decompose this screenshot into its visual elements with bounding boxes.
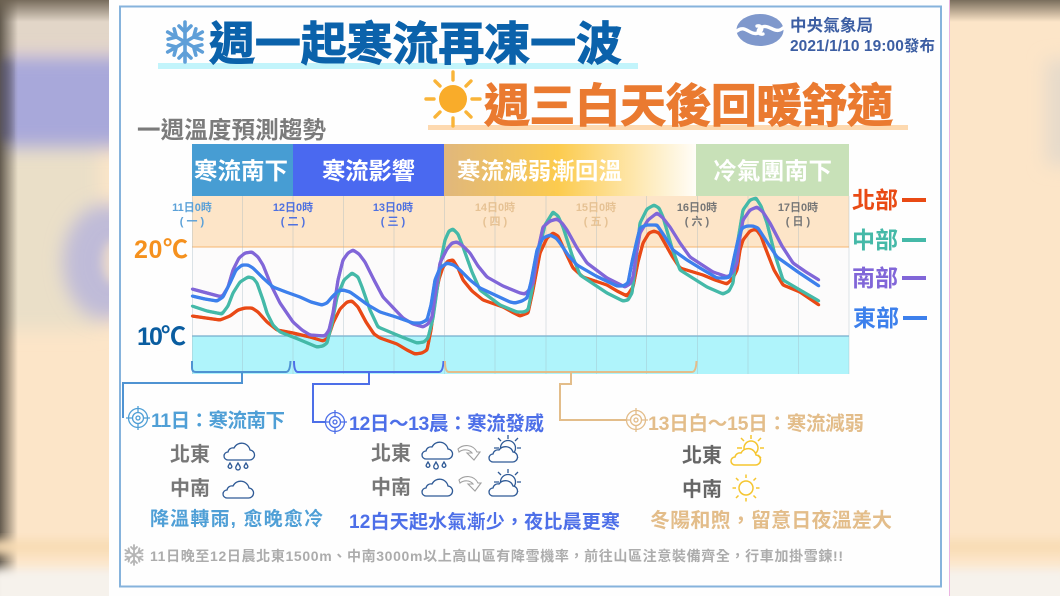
bracket: 13th to 15th bbox=[445, 361, 696, 420]
legend: north bbox=[852, 187, 926, 213]
icon: target bbox=[323, 410, 347, 434]
legend: central bbox=[852, 227, 926, 253]
icon: sun bbox=[732, 474, 760, 502]
legend: east bbox=[853, 305, 927, 331]
date labels: 14日0時 bbox=[475, 200, 515, 214]
icon: target bbox=[624, 408, 648, 432]
heading: 13日白～15日：寒流減弱 bbox=[648, 412, 864, 435]
icon: sun behind cloud bbox=[489, 469, 521, 496]
axis label: 10 degrees: 10℃ bbox=[137, 323, 186, 351]
icon: arrow bbox=[458, 446, 480, 460]
date labels: ( 二 ) bbox=[281, 216, 306, 228]
icon: target bbox=[126, 406, 150, 430]
region: north east: 北東 bbox=[170, 443, 210, 466]
bracket: 11th bbox=[123, 361, 290, 418]
caption: 降溫轉雨, 愈晚愈冷 bbox=[150, 507, 323, 530]
region: central south: 中南 bbox=[170, 477, 210, 500]
icon: arrow bbox=[459, 477, 481, 491]
panel: 13th to 15th bbox=[624, 408, 892, 532]
chart heading: 一週溫度預測趨勢 bbox=[137, 117, 326, 143]
date labels: 12日0時 bbox=[273, 200, 313, 214]
axis label: 20 degrees: 20℃ bbox=[134, 236, 188, 264]
legend bbox=[852, 187, 927, 331]
icon: CWB logo bbox=[736, 14, 784, 46]
title underline bbox=[158, 63, 638, 69]
panel: 11th bbox=[126, 406, 323, 530]
date labels: ( 日 ) bbox=[786, 215, 811, 228]
heading: 11日：寒流南下 bbox=[151, 409, 285, 432]
date labels: ( 四 ) bbox=[483, 216, 508, 228]
white sheet with blue frame bbox=[109, 0, 950, 596]
publish date: 2021/1/10 19:00發布 bbox=[790, 36, 935, 55]
band: cold air bbox=[696, 144, 849, 196]
date labels: ( 三 ) bbox=[381, 216, 406, 228]
date labels: 16日0時 bbox=[677, 200, 717, 214]
icon: sun bbox=[426, 72, 480, 126]
band: warming: 寒流減弱漸回溫 bbox=[457, 157, 622, 184]
icon: grey snowflake bbox=[124, 545, 144, 565]
band: cold surge south bbox=[192, 144, 293, 196]
region: central south: 中南 bbox=[371, 476, 411, 499]
line: south bbox=[192, 207, 819, 336]
legend: south: 南部 bbox=[852, 265, 898, 291]
phase bands bbox=[192, 144, 849, 196]
footnote bbox=[124, 545, 843, 565]
icon: cloud bbox=[223, 481, 254, 498]
region: central south: 中南 bbox=[682, 478, 722, 501]
date labels: ( 六 ) bbox=[685, 214, 710, 228]
legend: south bbox=[852, 265, 926, 291]
icon: rain cloud bbox=[422, 442, 453, 469]
title: 週一起寒流再凍一波 bbox=[209, 18, 622, 70]
publisher text: 中央氣象局 bbox=[790, 15, 873, 35]
temperature chart bbox=[123, 196, 849, 422]
line: central bbox=[192, 198, 819, 347]
panel: 12th to 13th bbox=[323, 410, 620, 533]
date labels bbox=[172, 200, 818, 228]
footnote text: 11日晚至12日晨北東1500m、中南3000m以上高山區有降雪機率，前往山區注意裝備齊全，行車加掛雪鍊!! bbox=[150, 548, 843, 564]
subtitle underline bbox=[428, 125, 908, 130]
subtitle: 週三白天後回暖舒適 bbox=[484, 80, 893, 132]
date labels: ( 一 ) bbox=[180, 216, 205, 228]
bracket: 12th to 13th bbox=[294, 361, 444, 422]
date labels: 11日0時 bbox=[172, 200, 212, 214]
date labels: 17日0時 bbox=[778, 200, 818, 214]
caption: 冬陽和煦，留意日夜溫差大 bbox=[650, 508, 892, 532]
band: cold surge impact: 寒流影響 bbox=[322, 157, 415, 184]
icon: sun behind cloud bbox=[489, 435, 521, 462]
heading: 12日～13晨：寒流發威 bbox=[349, 412, 544, 435]
date labels: 13日0時 bbox=[373, 200, 413, 214]
icon: rain cloud bbox=[224, 443, 255, 470]
region: north east: 北東 bbox=[371, 442, 411, 465]
band: cold air: 冷氣團南下 bbox=[713, 158, 832, 184]
caption: 12白天起水氣漸少，夜比晨更寒 bbox=[349, 510, 620, 533]
band: warming bbox=[444, 144, 696, 196]
legend: east: 東部 bbox=[853, 305, 899, 331]
line: east bbox=[192, 225, 819, 323]
region: north east: 北東 bbox=[682, 444, 722, 467]
icon: sun behind cloud bbox=[731, 435, 764, 465]
legend: north: 北部 bbox=[852, 187, 898, 213]
icon: cloud bbox=[422, 479, 453, 496]
line: north bbox=[192, 229, 819, 354]
date labels: ( 五 ) bbox=[584, 216, 609, 228]
icon: snowflake bbox=[165, 22, 205, 62]
legend: central: 中部 bbox=[852, 227, 898, 253]
date labels: 15日0時 bbox=[576, 200, 616, 214]
band: cold surge south: 寒流南下 bbox=[194, 157, 288, 184]
band: cold surge impact bbox=[293, 144, 444, 196]
logo and publisher bbox=[736, 14, 935, 55]
